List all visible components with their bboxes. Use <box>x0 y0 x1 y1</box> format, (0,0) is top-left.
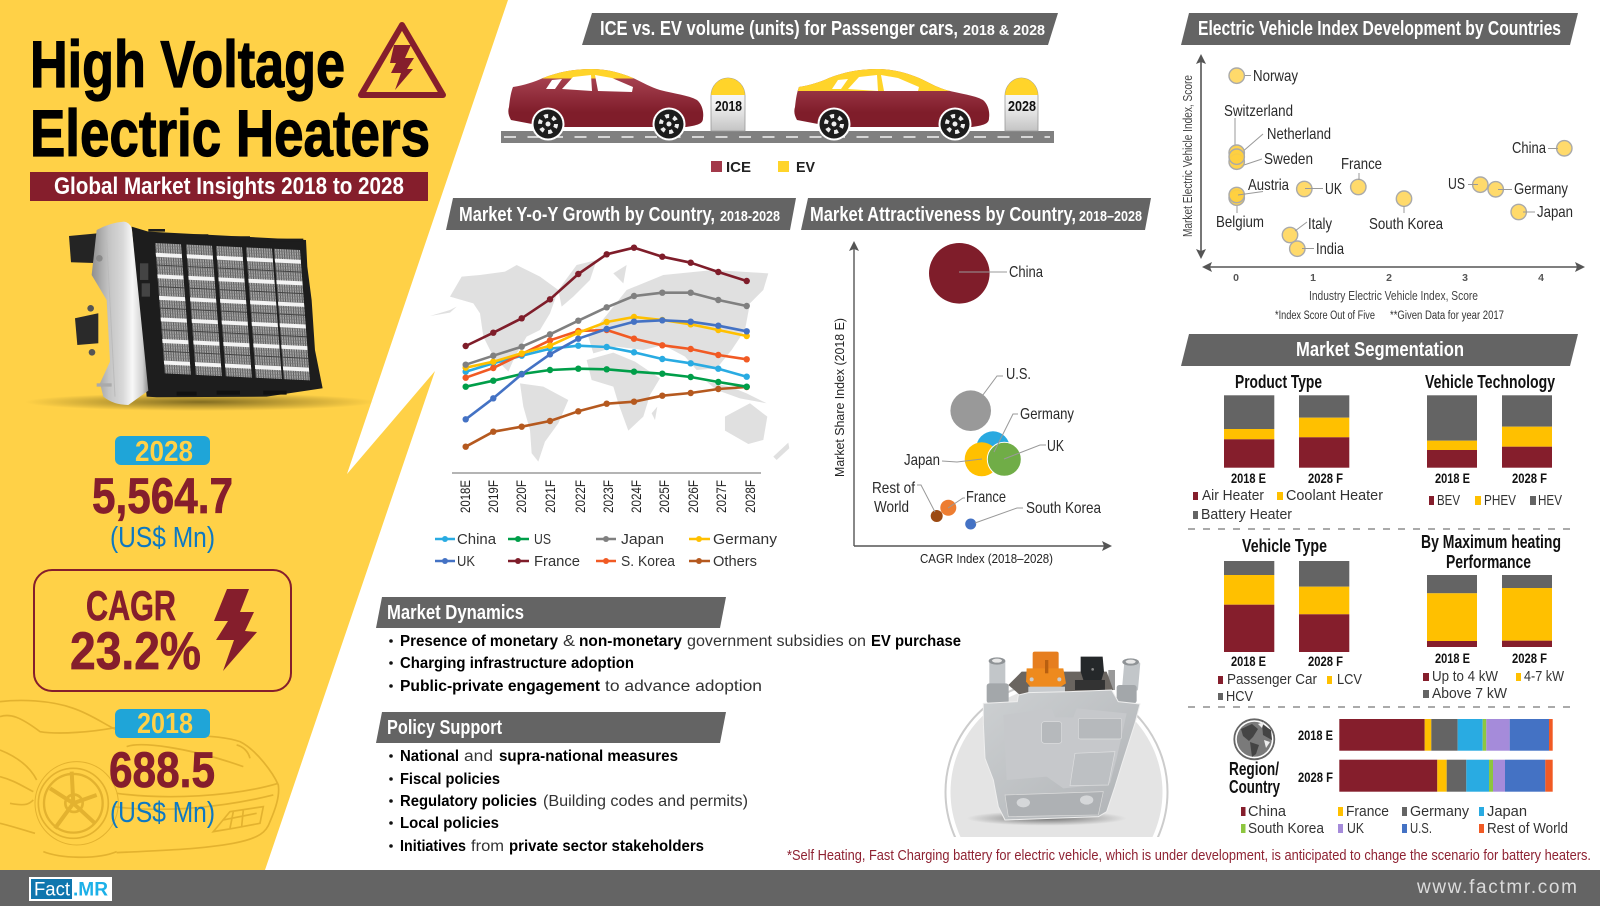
panel: policy support <box>376 712 748 855</box>
website: www.factmr.com <box>1416 877 1577 898</box>
heading: 2018 & 2028 <box>963 22 1045 39</box>
bubble: Germany: Germany <box>1514 181 1568 198</box>
value 688.5: 688.5 <box>109 742 215 798</box>
logo: Fact.MR: .MR <box>73 880 108 900</box>
bubble: Germany <box>1488 181 1568 198</box>
bubbles: Austria, Belgium: Belgium <box>1216 214 1264 231</box>
orange connector <box>1033 652 1059 672</box>
bubble: Norway: Norway <box>1253 68 1298 85</box>
chart: region / country: 2028 F <box>1298 769 1333 785</box>
x axis and year labels: 2028F <box>743 480 758 513</box>
region legend: UK <box>1347 821 1364 837</box>
series: China <box>462 342 750 380</box>
chart: product type: 2018 E <box>1231 470 1266 486</box>
heading: Market Segmentation <box>1296 339 1464 361</box>
stat: 2018 value <box>109 708 215 829</box>
chart: product type: Product Type <box>1235 371 1322 392</box>
bullet 2: Charging infrastructure adoption <box>400 655 634 672</box>
heading: Market Y-o-Y Growth by Country, <box>459 204 715 226</box>
bullet 5: private sector stakeholders <box>509 838 704 855</box>
chart: vehicle type: HCV <box>1226 689 1253 705</box>
bubble: UK: UK <box>1047 438 1064 455</box>
legend <box>711 159 815 176</box>
footer bar <box>0 870 1600 906</box>
bubble: France <box>940 489 1006 516</box>
bullet 3 <box>389 793 748 810</box>
series: S. Korea <box>462 327 750 381</box>
bubble: India: India <box>1316 241 1344 258</box>
series: US <box>462 366 750 390</box>
subtitle banner: Global Market Insights 2018 to 2028 <box>54 173 404 200</box>
chart: product type: Battery Heater <box>1201 507 1292 523</box>
line chart legend: S. Korea <box>621 554 676 570</box>
bubble: UK: UK <box>1325 181 1342 198</box>
bubble: Japan <box>1511 204 1573 221</box>
bubbles: Austria, Belgium <box>1216 177 1289 231</box>
chart: maximum heating performance: 2028 F <box>1512 650 1547 666</box>
line chart legend: Others <box>713 554 757 570</box>
chart: vehicle technology: Vehicle Technology <box>1425 371 1556 392</box>
region legend: Japan <box>1487 804 1527 820</box>
chart: vehicle type: 2028 F <box>1308 653 1343 669</box>
background car outline sketch <box>0 700 279 857</box>
heading: Market Attractiveness by Country, <box>810 204 1076 226</box>
line chart legend: US <box>534 532 551 548</box>
x axis and year labels: 2023F <box>601 480 616 513</box>
x axis ticks <box>1233 272 1544 284</box>
bubble: France: France <box>966 489 1006 506</box>
legend: ICE <box>726 159 751 176</box>
bubble: Rest of World <box>872 480 943 522</box>
chart: product type <box>1193 371 1383 523</box>
chart: product type: Coolant Heater <box>1286 488 1383 504</box>
icon: globe <box>1234 719 1274 759</box>
bullet 3: to advance adoption <box>605 678 762 695</box>
bullet 3: (Building codes and permits) <box>543 793 748 810</box>
line chart legend: Germany <box>713 532 778 548</box>
bubble: Germany <box>976 431 1010 465</box>
black connector <box>1081 657 1104 685</box>
bubble: UK <box>987 438 1064 476</box>
x axis and year labels: 2024F <box>629 480 644 513</box>
bullet 4: Local policies <box>400 815 499 832</box>
bullet 1 <box>389 633 961 650</box>
region legend: Rest of World <box>1487 821 1568 837</box>
value 5,564.7: 5,564.7 <box>92 468 233 524</box>
bubbles: Switzerland, Netherland, Sweden: Sweden <box>1264 151 1313 168</box>
title line 1: High Voltage <box>30 27 345 101</box>
footnotes: *Index Score Out of Five <box>1275 310 1375 322</box>
bubble: France <box>1341 156 1382 195</box>
car 2028: larger EV share <box>794 69 989 140</box>
bubble: UK <box>1297 181 1342 198</box>
bullet 1: government subsidies on <box>687 633 866 650</box>
bullet 1: non-monetary <box>579 633 682 650</box>
icon: lightning bolt <box>214 589 257 671</box>
bubble: China: China <box>1009 264 1043 281</box>
chart: maximum heating performance: Up to 4 kW <box>1432 669 1498 685</box>
bubble: India <box>1290 241 1344 258</box>
panel: ICE vs EV volume <box>501 13 1058 176</box>
series: UK <box>462 317 750 422</box>
bubble: Japan: Japan <box>1537 204 1573 221</box>
chart: vehicle type <box>1218 535 1362 705</box>
panel: market Y-o-Y growth <box>430 198 796 570</box>
series: Japan <box>462 290 750 368</box>
chart: vehicle type: Passenger Car <box>1227 672 1317 688</box>
heading <box>376 712 726 743</box>
heading: 2018-2028 <box>720 208 780 225</box>
road <box>501 131 1054 143</box>
line chart legend: UK <box>457 554 475 570</box>
panel: market dynamics <box>376 597 961 695</box>
panel: market segmentation <box>1181 334 1578 837</box>
x axis label: Industry Electric Vehicle Index, Score <box>1309 288 1478 303</box>
title line 2: Electric Heaters <box>30 96 430 170</box>
logo: Fact.MR <box>29 877 112 901</box>
chart: vehicle technology: PHEV <box>1484 493 1516 509</box>
chart: vehicle technology: 2018 E <box>1435 470 1470 486</box>
chart: vehicle technology <box>1425 371 1562 509</box>
bubbles: Austria, Belgium: Austria <box>1248 177 1289 194</box>
x axis and year labels: 2022F <box>573 480 588 513</box>
panel: market attractiveness <box>801 198 1151 566</box>
bubble: Rest of World: World <box>874 499 909 516</box>
x axis and year labels: 2020F <box>514 480 529 513</box>
chart: maximum heating performance <box>1421 531 1564 702</box>
bullet 5: from <box>471 838 504 855</box>
product image: heater on grey disc <box>944 652 1168 837</box>
heading <box>582 13 1058 45</box>
bullet 3: Public-private engagement <box>400 678 600 695</box>
bubbles: Switzerland, Netherland, Sweden: Switzerland <box>1224 103 1293 120</box>
bullet 1: & <box>563 633 576 650</box>
left pipe <box>989 660 1005 687</box>
world map backdrop <box>430 260 789 462</box>
chart: product type: Air Heater <box>1202 488 1264 504</box>
bubble: US: US <box>1448 176 1465 193</box>
bullet 3 <box>389 678 762 695</box>
bubble: South Korea: South Korea <box>1026 500 1101 517</box>
bubble: France: France <box>1341 156 1382 173</box>
x axis label: CAGR Index (2018–2028) <box>920 552 1053 566</box>
x axis ticks: 0 <box>1233 272 1239 284</box>
year pill 2028: 2028 <box>135 436 193 468</box>
callout: CAGR <box>34 570 291 691</box>
heading <box>1181 334 1578 366</box>
legend: EV <box>796 159 815 176</box>
chart: maximum heating performance: 2018 E <box>1435 650 1470 666</box>
bubble: South Korea: South Korea <box>1369 216 1443 233</box>
axes <box>849 241 1112 551</box>
unit: (US$ Mn) <box>110 522 215 554</box>
chart: vehicle technology: HEV <box>1538 493 1562 509</box>
y axis label: Market Electric Vehicle Index, Score <box>1180 75 1195 237</box>
bubble: China: China <box>1512 140 1546 157</box>
region legend: France <box>1346 804 1389 820</box>
chart: vehicle type: Vehicle Type <box>1242 535 1327 556</box>
bubble: China <box>929 243 1043 304</box>
bullet 1 <box>389 748 678 765</box>
bubble: Japan: Japan <box>904 452 940 469</box>
x axis ticks: 1 <box>1310 272 1316 284</box>
series: France <box>462 244 750 349</box>
bubble: Italy <box>1282 216 1332 243</box>
chart: maximum heating performance: Performance <box>1446 551 1531 572</box>
chart: product type: 2028 F <box>1308 470 1343 486</box>
milestone 2028: 2028 <box>1008 99 1036 115</box>
x axis ticks: 4 <box>1538 272 1544 284</box>
connector middle <box>75 313 98 345</box>
title <box>30 27 430 170</box>
bullet 5 <box>389 838 704 855</box>
region legend <box>1241 804 1568 837</box>
heading <box>801 198 1151 230</box>
heading: 2018–2028 <box>1079 208 1142 225</box>
right pipe <box>1122 661 1140 691</box>
x axis and year labels: 2026F <box>686 480 701 513</box>
bubbles: Switzerland, Netherland, Sweden <box>1224 103 1331 169</box>
callout: CAGR: CAGR <box>86 582 176 629</box>
heading: Market Dynamics <box>387 602 524 624</box>
heading <box>376 597 726 628</box>
stacked bar 2028 <box>1339 760 1553 792</box>
bubble: Norway <box>1229 68 1298 85</box>
yellow left panel background <box>0 0 508 870</box>
bubble: Rest of World: Rest of <box>872 480 915 497</box>
line chart legend: Japan <box>621 532 664 548</box>
x axis and year labels <box>452 473 761 513</box>
axes <box>1196 54 1585 272</box>
Germany label: Germany <box>1020 406 1074 423</box>
x axis ticks: 2 <box>1386 272 1392 284</box>
product image: high voltage heater unit <box>25 222 375 411</box>
panel: EV index <box>1180 13 1585 322</box>
bullet 2: Fiscal policies <box>400 771 500 788</box>
region legend: South Korea <box>1248 821 1325 837</box>
car 2018: mostly ICE <box>508 69 703 140</box>
chart: region / country: Region/ <box>1229 758 1279 779</box>
chart: region / country: Country <box>1229 776 1281 797</box>
x axis and year labels: 2025F <box>657 480 672 513</box>
bubble: Japan <box>904 442 999 476</box>
line chart series <box>462 244 750 450</box>
bubbles: Switzerland, Netherland, Sweden: Netherland <box>1267 126 1331 143</box>
bubble: Italy: Italy <box>1308 216 1332 233</box>
y axis label: Market Share Index (2018 E) <box>833 318 847 477</box>
bullet 1: EV purchase <box>871 633 961 650</box>
bubble: U.S.: U.S. <box>1006 366 1031 383</box>
x axis and year labels: 2021F <box>543 480 558 513</box>
heading: Policy Support <box>387 717 502 739</box>
icon: high voltage warning triangle <box>361 25 443 95</box>
region legend: U.S. <box>1410 821 1432 837</box>
region legend: Germany <box>1410 804 1470 820</box>
line chart legend: China <box>457 532 497 548</box>
bullet 1: supra-national measures <box>499 748 678 765</box>
line chart legend <box>435 532 778 570</box>
unit: (US$ Mn) <box>110 797 215 829</box>
Germany label <box>994 406 1074 452</box>
chart: vehicle type: LCV <box>1337 672 1362 688</box>
milestone 2028 <box>1005 78 1038 131</box>
callout: CAGR: 23.2% <box>70 622 201 681</box>
stat: 2028 value <box>92 436 233 554</box>
stacked bar 2018 <box>1339 719 1553 751</box>
bullet 1: National <box>400 748 459 765</box>
bullet 1: and <box>464 748 493 765</box>
x axis and year labels: 2019F <box>486 480 501 513</box>
chart: region / country: 2018 E <box>1298 727 1333 743</box>
bubble: US <box>1448 176 1488 193</box>
chart: region / country <box>1229 719 1568 837</box>
chart: vehicle type: 2018 E <box>1231 653 1266 669</box>
bullet 1: Presence of monetary <box>400 633 558 650</box>
chart: vehicle technology: BEV <box>1437 493 1460 509</box>
chart: vehicle technology: 2028 F <box>1512 470 1547 486</box>
heading <box>446 198 796 230</box>
year pill 2018: 2018 <box>137 708 193 740</box>
bullet 5: Initiatives <box>400 838 466 855</box>
footnotes <box>1275 310 1504 322</box>
line chart legend: France <box>534 554 580 570</box>
bubble: China <box>1512 140 1572 157</box>
heading: ICE vs. EV volume (units) for Passenger cars, <box>600 18 958 40</box>
region legend: China <box>1248 804 1287 820</box>
x axis ticks: 3 <box>1462 272 1468 284</box>
bubble: U.S. <box>950 366 1031 431</box>
chart: maximum heating performance: 4-7 kW <box>1524 669 1564 685</box>
connector top <box>69 233 102 263</box>
chart: maximum heating performance: Above 7 kW <box>1432 686 1507 702</box>
bubble: South Korea <box>965 500 1101 530</box>
milestone 2018 <box>711 78 745 131</box>
footnotes: **Given Data for year 2017 <box>1390 310 1504 322</box>
heading <box>1181 13 1578 45</box>
bubble: South Korea <box>1369 191 1443 233</box>
logo: Fact.MR: Fact <box>34 880 71 900</box>
series: Others <box>462 384 750 450</box>
bullet 3: Regulatory policies <box>400 793 537 810</box>
year pill 2028 <box>115 436 210 468</box>
x axis and year labels: 2018E <box>458 480 473 513</box>
milestone 2018: 2018 <box>715 99 742 115</box>
series: Germany <box>462 314 750 371</box>
plate <box>983 690 1140 820</box>
x axis and year labels: 2027F <box>714 480 729 513</box>
